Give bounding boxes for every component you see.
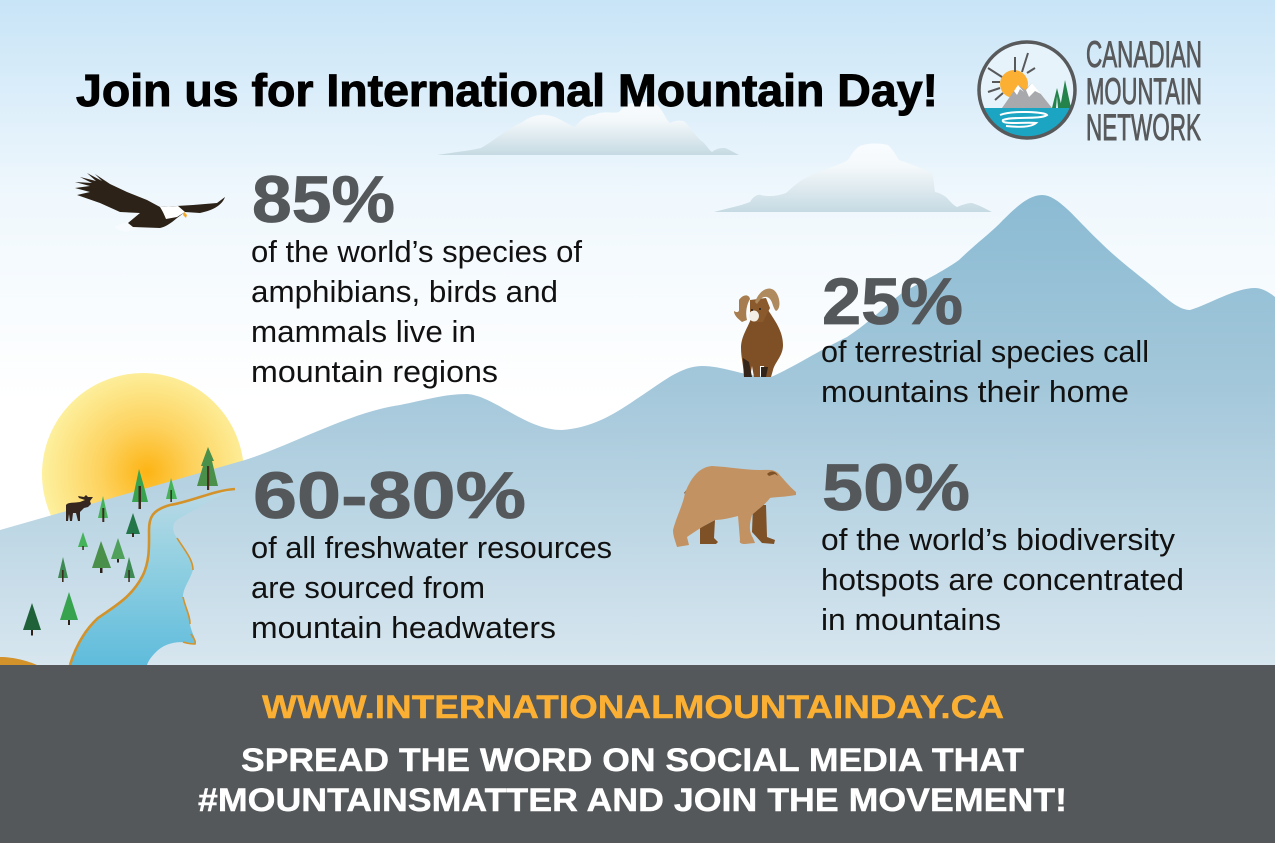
trees bbox=[23, 447, 218, 636]
stat: 85% bbox=[251, 162, 582, 389]
stat: 85%: of the world’s species of bbox=[251, 234, 582, 269]
stat: 60-80%: are sourced from bbox=[251, 570, 485, 605]
river bank: right bbox=[177, 538, 195, 644]
icon: eagle bbox=[75, 173, 225, 231]
stat: 60-80% bbox=[251, 458, 612, 645]
river bank: left bbox=[70, 489, 235, 665]
stat: 50%: of the world’s biodiversity bbox=[821, 522, 1175, 557]
logo wordmark: CANADIAN bbox=[1086, 34, 1202, 75]
logo wordmark: NETWORK bbox=[1086, 107, 1201, 148]
ground patch: orange bbox=[0, 657, 37, 665]
title: Join us for International Mountain Day! bbox=[76, 65, 938, 116]
logo wordmark: MOUNTAIN bbox=[1086, 71, 1202, 112]
stat: 60-80%: 60-80% bbox=[253, 458, 526, 532]
stat: 85%: 85% bbox=[252, 162, 395, 236]
stat: 25% bbox=[821, 264, 1149, 409]
stat: 25%: mountains their home bbox=[821, 374, 1129, 409]
call to action: SPREAD THE WORD ON SOCIAL MEDIA THAT bbox=[241, 742, 1025, 778]
stat: 25%: of terrestrial species call bbox=[821, 334, 1149, 369]
stat: 85%: amphibians, birds and bbox=[251, 274, 558, 309]
stat: 50%: hotspots are concentrated bbox=[821, 562, 1184, 597]
stat: 85%: mountain regions bbox=[251, 354, 498, 389]
stat: 50%: 50% bbox=[822, 450, 970, 524]
logo wordmark bbox=[1086, 34, 1202, 148]
call to action bbox=[198, 742, 1067, 818]
mountain range bbox=[0, 195, 1275, 665]
cloud: left bbox=[437, 102, 739, 155]
icon: moose bbox=[66, 495, 93, 521]
logo bbox=[977, 40, 1202, 141]
stat: 50%: in mountains bbox=[821, 602, 1001, 637]
sun bbox=[42, 373, 244, 575]
footer banner bbox=[0, 665, 1275, 843]
stat: 25%: 25% bbox=[822, 264, 963, 338]
stat: 60-80%: mountain headwaters bbox=[251, 610, 556, 645]
logo emblem bbox=[975, 42, 1079, 142]
river bbox=[70, 489, 235, 665]
call to action: #MOUNTAINSMATTER AND JOIN THE MOVEMENT! bbox=[198, 782, 1067, 818]
website url: WWW.INTERNATIONALMOUNTAINDAY.CA bbox=[262, 689, 1004, 725]
icon: bear bbox=[673, 466, 796, 547]
stat: 60-80%: of all freshwater resources bbox=[251, 530, 612, 565]
icon: bighorn sheep bbox=[734, 288, 783, 377]
stat: 50% bbox=[821, 450, 1184, 637]
cloud: right bbox=[714, 144, 992, 212]
stat: 85%: mammals live in bbox=[251, 314, 476, 349]
sky background bbox=[0, 0, 1275, 400]
